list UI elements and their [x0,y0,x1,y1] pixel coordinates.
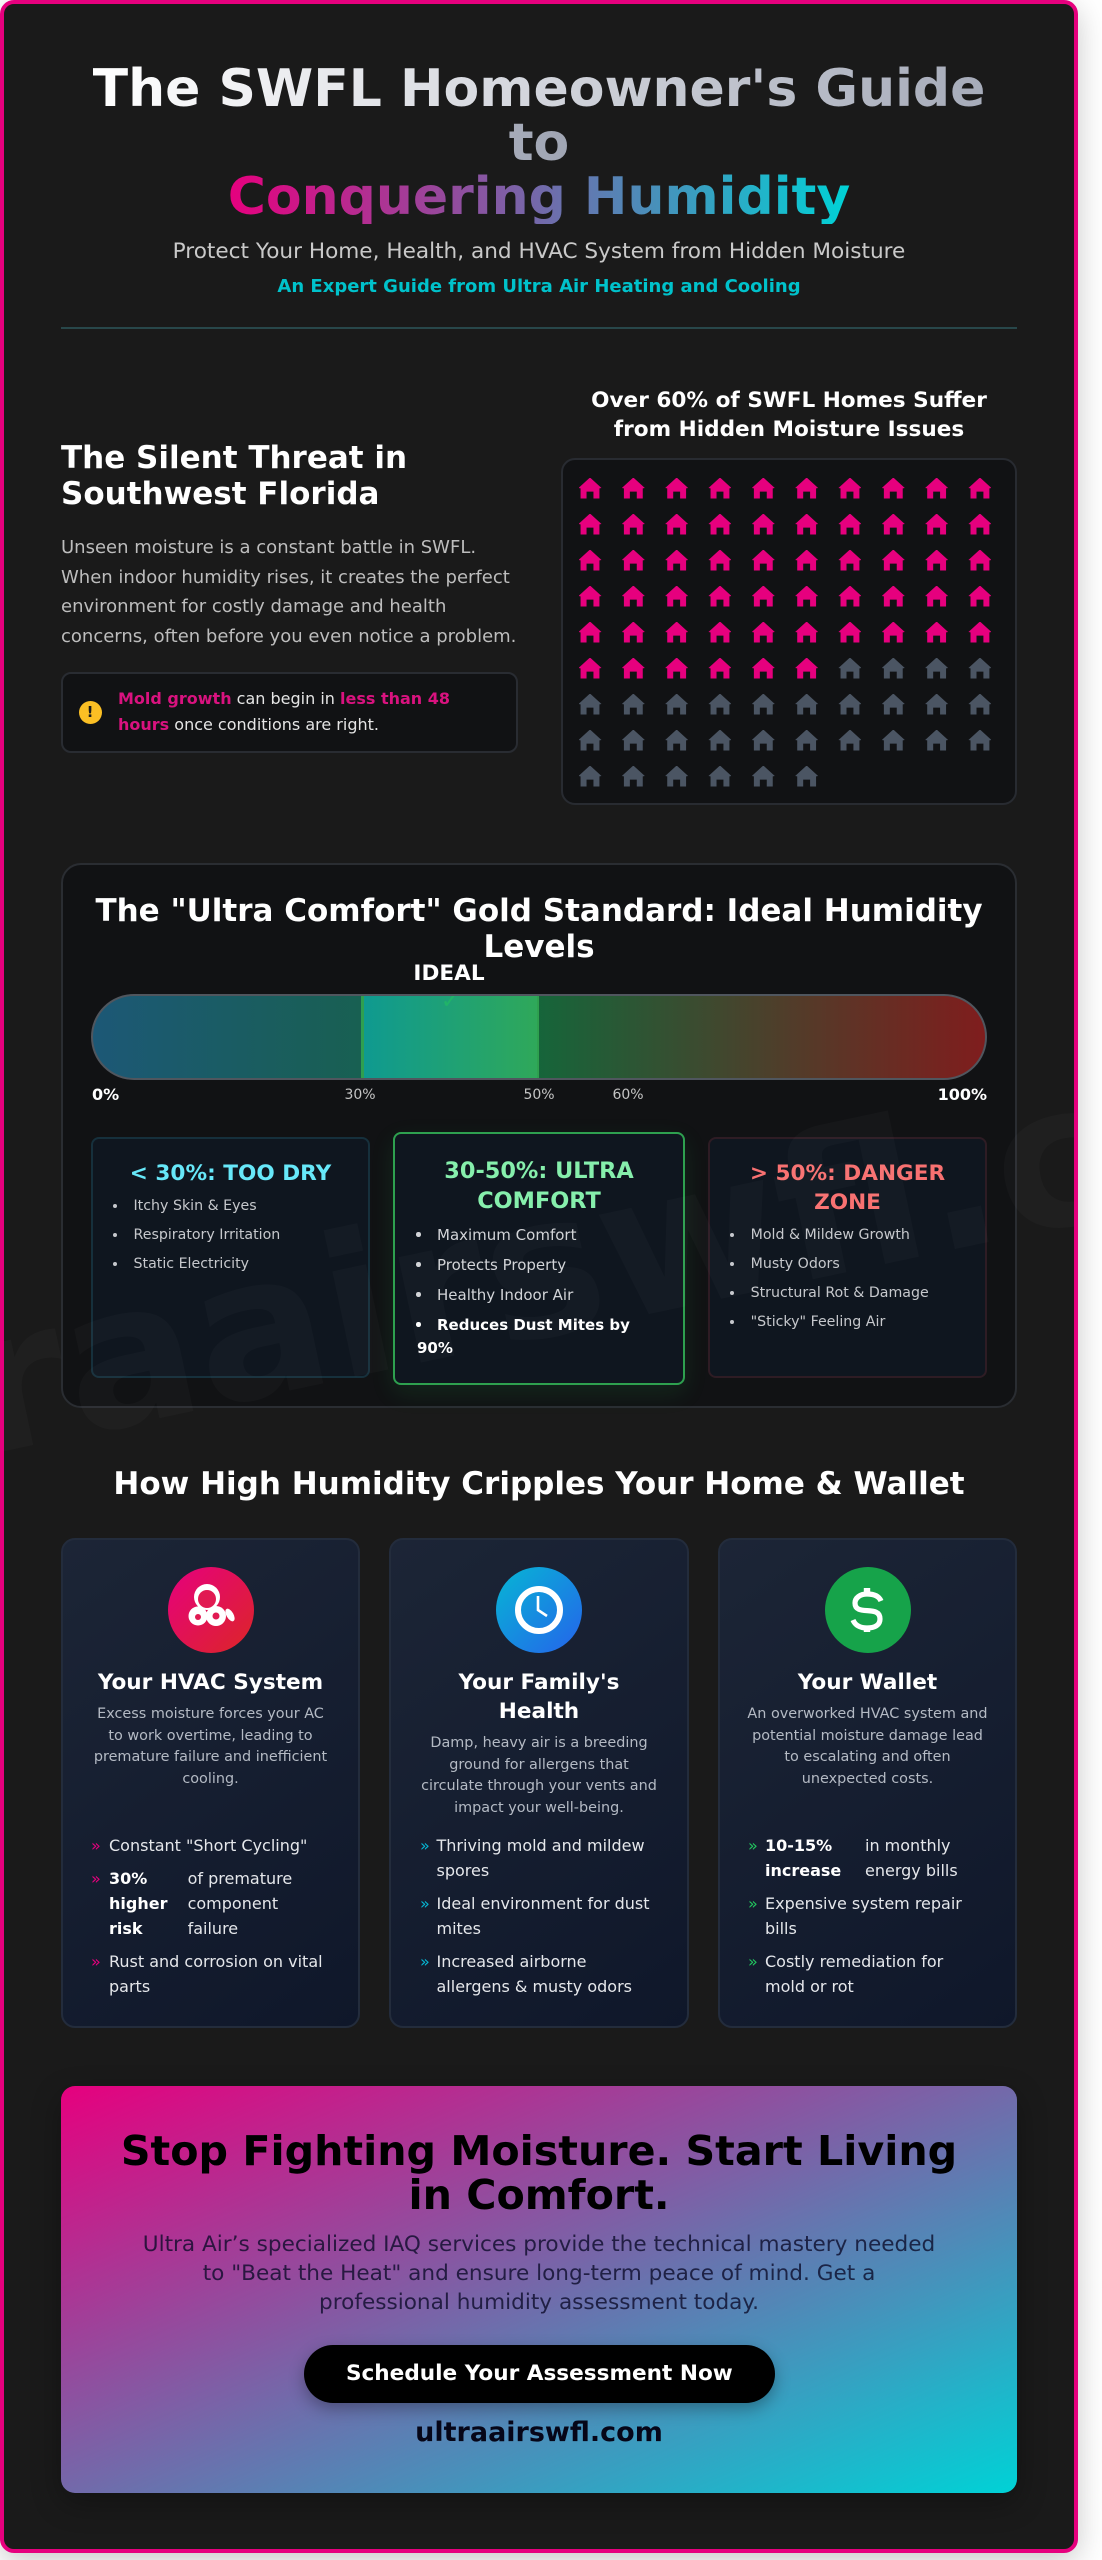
ultra comfort list: Maximum Comfort [437,1226,576,1244]
icon: warning [78,700,102,724]
bullet 1: » [420,1836,430,1855]
CTA heading [61,2129,1017,2217]
icon: warning: ! [87,702,93,720]
bullet 3 text [109,1952,323,1996]
danger zone heading [750,1161,945,1214]
danger zone heading: ZONE [814,1190,881,1214]
ultra comfort heading: 30-50%: ULTRA [444,1158,634,1184]
mold alert callout [61,672,518,753]
danger zone list: Mold & Mildew Growth [751,1226,910,1242]
CTA paragraph [61,2230,1017,2316]
HVAC description: premature failure and inefficient [94,1749,327,1765]
bullet 1 bold text: increase [765,1861,841,1880]
threat paragraph: When indoor humidity rises, it creates the perfect [61,567,510,588]
title: Conquering Humidity [228,167,850,227]
CTA paragraph: professional humidity assessment today. [319,2290,759,2314]
gold standard heading [95,893,983,965]
too dry list [113,1198,280,1272]
gauge label 60%: 60% [612,1086,644,1102]
title: to [509,113,569,173]
panel: gold standard humidity levels [61,863,1017,1408]
CTA button [304,2345,775,2402]
health title [458,1670,619,1724]
website URL: ultraairswfl.com [415,2417,663,2448]
gauge label 100%: 100% [938,1084,987,1104]
gauge label 0%: 0% [92,1084,119,1104]
ultra comfort heading [444,1158,634,1214]
threat paragraph: Unseen moisture is a constant battle in SWFL. [61,537,476,558]
bullet 3 text: allergens & musty odors [436,1976,632,1996]
CTA heading: in Comfort. [408,2171,670,2219]
bullet 2 text: Ideal environment for dust [436,1894,650,1912]
health title: Health [499,1699,579,1724]
danger zone list [730,1226,929,1330]
alert text: Mold growth can begin in less than 48 [118,689,450,708]
CTA paragraph: Ultra Air’s specialized IAQ services provide the technical mastery needed [143,2232,935,2256]
icon: clock [496,1567,582,1653]
title [93,59,985,227]
HVAC description: to work overtime, leading to [108,1728,313,1744]
threat paragraph: concerns, often before you even notice a problem. [61,626,516,647]
danger zone heading: > 50%: DANGER [750,1161,945,1186]
bullet 3: » [91,1952,101,1970]
gauge label 30%: 30% [344,1086,376,1102]
health description [421,1735,657,1816]
threat heading [61,440,407,512]
bullet 2 bold text: 30% [109,1868,147,1888]
bullet 1 bold text [765,1836,841,1880]
house icons [579,478,991,786]
card: wallet [718,1538,1017,2028]
expert tagline: An Expert Guide from Ultra Air Heating and Cooling [277,276,801,297]
bullet 1 text: Constant "Short Cycling" [109,1836,307,1855]
ultra comfort list continuation: 90% [417,1339,453,1357]
bullet 2 text: failure [188,1918,238,1938]
impact heading: How High Humidity Cripples Your Home & Wallet [113,1466,965,1502]
ultra comfort list: Healthy Indoor Air [437,1286,573,1304]
bullet 3 text: Rust and corrosion on vital [109,1952,323,1970]
bullet 1 bold text: 10-15% [765,1836,832,1855]
bullet 2: » [91,1868,101,1888]
ideal zone segment [360,996,539,1078]
pictogram heading: Over 60% of SWFL Homes Suffer [591,388,987,412]
bullet 3: » [420,1952,430,1970]
house grid panel [561,458,1017,805]
ultra comfort list [416,1226,630,1334]
HVAC description [94,1706,327,1787]
panel: silent threat [61,440,518,753]
bullet 1 text [865,1836,958,1880]
panel: call to action [61,2086,1017,2493]
bullet 3: » [748,1952,758,1970]
bullet 1 text: energy bills [865,1861,958,1880]
bullet 2: » [420,1894,430,1912]
header [61,59,1017,329]
zone card: ultra comfort [393,1132,685,1385]
health description: impact your well-being. [454,1800,624,1816]
card: HVAC system [61,1538,360,2028]
bullet 1 text: in monthly [865,1836,951,1855]
card: family health [389,1538,689,2028]
too dry list: Respiratory Irritation [134,1226,280,1242]
humidity gauge bar [91,994,987,1080]
bullet 1: » [748,1836,758,1855]
bullet 3 text [765,1952,944,1996]
ultra comfort heading: COMFORT [477,1188,601,1214]
wallet description [747,1706,988,1787]
HVAC description: cooling. [182,1771,239,1787]
icon: dollar [824,1567,910,1653]
wallet bullet list [748,1836,962,1996]
health title: Your Family's [459,1670,619,1695]
HVAC bullet list [91,1836,323,1996]
zone card: too dry [91,1137,370,1378]
gauge label 50%: 50% [523,1086,555,1102]
bullet 1 text: Thriving mold and mildew [436,1836,645,1855]
bullet 1 text: spores [436,1861,489,1880]
health bullet list [420,1836,650,1996]
panel: 60 percent pictogram [561,388,1017,805]
bullet 2 text: Expensive system repair [765,1894,962,1912]
HVAC description: Excess moisture forces your AC [97,1706,324,1722]
bullet 2 bold text: higher [109,1894,167,1912]
title: The SWFL Homeowner's Guide [93,59,985,119]
too dry list: Static Electricity [134,1256,249,1272]
HVAC title: Your HVAC System [98,1670,323,1695]
ultra comfort list: Reduces Dust Mites by [437,1316,630,1334]
bullet 2: » [748,1894,758,1912]
pictogram heading [591,388,987,442]
ultra comfort list: Protects Property [437,1256,566,1274]
bullet 2 text: bills [765,1918,797,1938]
CTA button: Schedule Your Assessment Now [346,2361,733,2386]
subtitle: Protect Your Home, Health, and HVAC System from Hidden Moisture [173,239,905,264]
bullet 2 text: component [188,1894,278,1912]
bullet 3 text: Increased airborne [436,1952,587,1970]
CTA heading: Stop Fighting Moisture. Start Living [121,2127,957,2175]
bullet 1: » [91,1836,101,1855]
bullet 2 text [765,1894,962,1938]
wallet description: An overworked HVAC system and [747,1706,988,1722]
danger zone list: Structural Rot & Damage [751,1284,929,1300]
threat heading: The Silent Threat in [61,440,407,476]
pictogram heading: from Hidden Moisture Issues [614,416,964,442]
too dry heading: < 30%: TOO DRY [130,1161,331,1186]
wallet description: unexpected costs. [802,1771,933,1787]
bullet 1 text [436,1836,645,1880]
bullet 2 bold text: risk [109,1918,143,1938]
bullet 2 bold text [109,1868,168,1938]
too dry list: Itchy Skin & Eyes [134,1198,257,1214]
threat paragraph [61,537,516,647]
zone card: danger zone [708,1137,987,1378]
bullet 3 text [436,1952,632,1996]
gold standard heading: Levels [483,929,595,965]
health description: ground for allergens that [449,1757,629,1773]
bullet 2 text: mites [436,1918,481,1938]
bullet 2 text: of premature [188,1868,292,1888]
danger zone list: "Sticky" Feeling Air [751,1314,885,1330]
bullet 3 text: mold or rot [765,1976,854,1996]
wallet description: potential moisture damage lead [752,1728,983,1744]
threat paragraph: environment for costly damage and health [61,596,446,617]
bullet 2 text [436,1894,650,1938]
alert text: hours once conditions are right. [118,715,379,734]
gold standard heading: The "Ultra Comfort" Gold Standard: Ideal Humidity [95,893,983,929]
ideal marker label: IDEAL [413,961,485,986]
icon: hvac fan [168,1567,254,1653]
wallet title: Your Wallet [798,1670,937,1695]
alert text [118,689,450,734]
wallet description: to escalating and often [784,1749,951,1765]
danger zone list: Musty Odors [751,1256,840,1272]
health description: Damp, heavy air is a breeding [430,1735,648,1751]
threat heading: Southwest Florida [61,476,379,512]
bullet 2 text [188,1868,292,1938]
CTA paragraph: to "Beat the Heat" and ensure long-term peace of mind. Get a [203,2260,875,2286]
bullet 3 text: Costly remediation for [765,1952,943,1970]
health description: circulate through your vents and [421,1778,657,1794]
divider [61,327,1017,329]
bullet 3 text: parts [109,1976,150,1996]
section: impact of humidity [61,1466,1017,2028]
